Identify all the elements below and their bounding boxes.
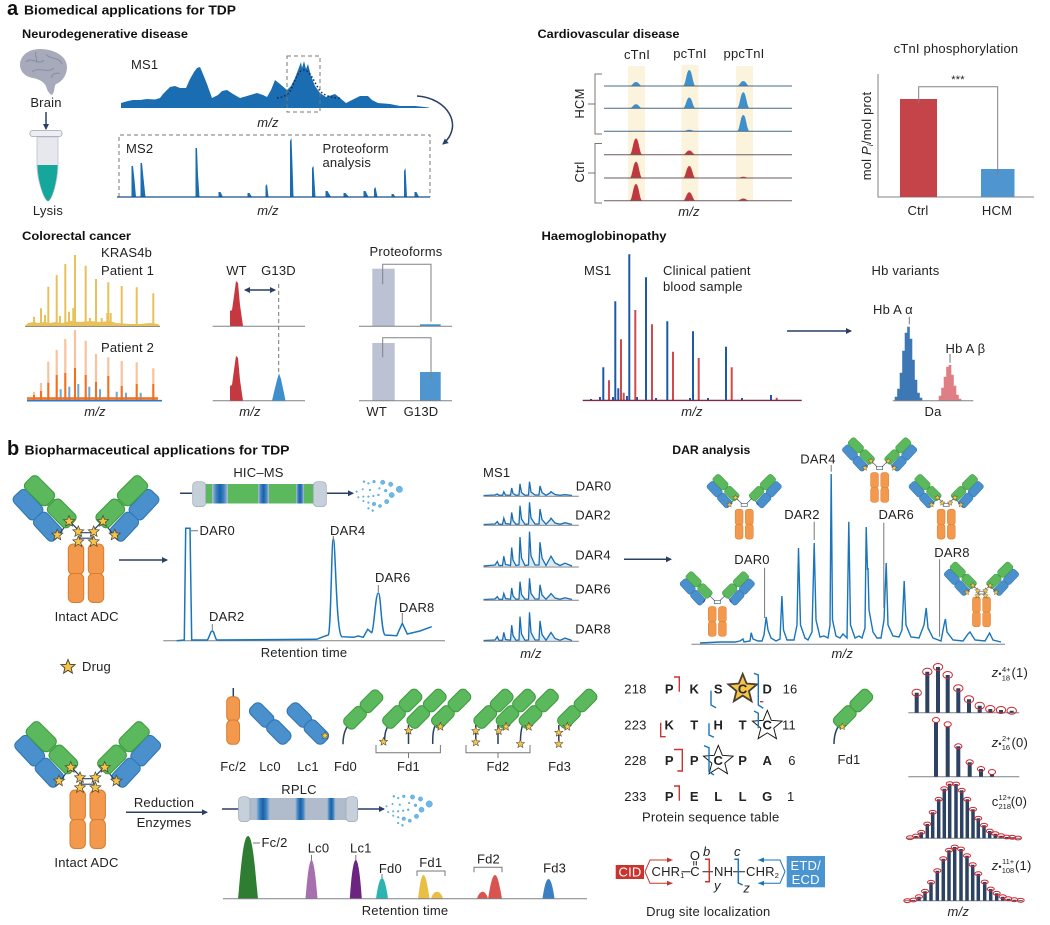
icon: Fd0 [342, 688, 385, 744]
label: Hb A beta: Hb A β [946, 341, 985, 356]
chart: patient 2 spectrum [27, 330, 162, 401]
label: RPLC: RPLC [281, 782, 317, 797]
peak labels: Lc0 [308, 840, 329, 856]
peak labels: DAR2 [209, 609, 244, 624]
sequence residues [624, 682, 797, 804]
row labels [575, 478, 611, 636]
label: z18: 18 [1002, 674, 1010, 682]
heading: neurodegenerative disease: Neurodegenerative disease [22, 27, 188, 41]
label: Intact ADC: Intact ADC [55, 609, 119, 624]
panel: haemoglobinopathy [542, 229, 985, 419]
label: Hb A alpha: Hb A α [873, 302, 913, 317]
labels: WT and G13D: WT [226, 263, 247, 278]
label: Ctrl: Ctrl [572, 161, 587, 183]
axis label: m/z: m/z [257, 115, 279, 130]
bracket: Fd2 [466, 745, 530, 758]
label: ETD/ECD: ETD/ [790, 858, 821, 873]
isotope markers: z16 [932, 718, 996, 774]
peak labels [262, 835, 566, 876]
label: Proteoforms: Proteoforms [369, 244, 443, 259]
panel: colorectal cancer [22, 229, 452, 419]
arrow [119, 559, 167, 561]
tick [909, 317, 950, 363]
icon: Fd1 [831, 687, 875, 744]
icon: Fd3 [555, 687, 599, 748]
sequence residues: 218 [624, 682, 647, 696]
panel: cTnI phosphorylation bar chart [859, 41, 1034, 218]
chart: deconvoluted spectrum [700, 474, 1001, 643]
icon: electrospray [356, 480, 403, 512]
peak labels: DAR8 [399, 600, 434, 615]
blue chevron arrows [758, 860, 785, 883]
sequence residues: 228 [624, 753, 647, 768]
axes [878, 74, 1034, 197]
panel: DAR analysis [672, 437, 1020, 661]
labels: WT and G13D [226, 263, 296, 278]
chemical structure: z [742, 880, 750, 896]
axis label: Da: Da [924, 404, 942, 419]
peak labels: DAR6 [878, 507, 914, 522]
sequence residues: 16 [783, 682, 797, 696]
fragment labels: Fd2 [486, 759, 510, 774]
axis label: m/z: m/z [84, 404, 106, 419]
axis label: m/z: m/z [257, 203, 279, 218]
sequence residues: 233 [624, 789, 647, 804]
icon: Lc0 [247, 701, 293, 746]
arrow heads [758, 858, 764, 886]
label: Drug: Drug [82, 659, 111, 674]
label: MS1: MS1 [584, 263, 611, 278]
peak labels [200, 523, 434, 624]
label: z16: 2+ [1002, 734, 1011, 743]
chart: z108 isotopic bars [907, 847, 1021, 901]
section a heading: Biomedical applications for TDP [24, 2, 236, 18]
star: outline row 2 [752, 710, 782, 739]
sequence residues: E [690, 789, 699, 804]
label: Intact ADC: Intact ADC [54, 855, 119, 870]
chart: chromatogram [177, 528, 432, 641]
peak: G13D patient 2 [272, 373, 286, 401]
sequence residues: 223 [624, 718, 647, 732]
label: Lysis: Lysis [33, 203, 63, 218]
label: z16: (0) [1012, 735, 1028, 750]
icon: Fc/2 [227, 688, 240, 744]
leader lines [765, 465, 940, 637]
chart: Hb A alpha envelope [896, 327, 921, 401]
label: Brain: Brain [30, 95, 62, 110]
baseline [692, 643, 1005, 645]
sequence residues: P [690, 753, 699, 768]
label: CID: CID [618, 864, 642, 880]
arrow [126, 811, 207, 813]
peak ticks and brackets [253, 843, 502, 878]
icon: lysis tube [30, 130, 62, 201]
sequence residues: 11 [782, 718, 796, 732]
label: Hb variants: Hb variants [872, 263, 940, 278]
blue bracket [734, 859, 743, 885]
heading: DAR analysis [672, 443, 751, 457]
sequence residues: P [665, 753, 674, 768]
baseline [583, 399, 802, 401]
peak labels: DAR2 [784, 507, 820, 522]
icon: DAR8 antibody [943, 561, 1020, 627]
dashed selection box [287, 56, 320, 112]
chart: MS1 blue series [591, 254, 771, 401]
sequence residues: L [739, 789, 747, 804]
fragment labels: Fd0 [334, 759, 357, 774]
bracket: Fd1 [376, 745, 440, 758]
labels: proteoform columns: ppcTnI [724, 46, 764, 61]
fragment labels: Lc1 [297, 759, 319, 774]
row labels: DAR4 [575, 548, 611, 562]
label: HCM: HCM [982, 203, 1012, 218]
bar: HCM [981, 169, 1014, 197]
arrow heads [667, 858, 673, 886]
chemical structure: O [690, 848, 700, 863]
arrow [787, 330, 851, 332]
panel: Fd1 fragment spectra [831, 664, 1032, 919]
baselines [213, 326, 305, 401]
chart: stacked MS1 spectra [484, 482, 572, 640]
label: Enzymes: Enzymes [137, 815, 192, 830]
chemical structure: 2 [775, 871, 779, 880]
icon: Fd1 variants [379, 687, 473, 745]
peak labels: Fc/2 [262, 835, 288, 850]
icon: drug star [61, 659, 75, 673]
sequence residues: T [739, 718, 747, 732]
baseline [893, 400, 973, 402]
peak: WT patient 1 [230, 281, 243, 326]
baselines [904, 713, 1023, 901]
row labels: DAR2 [575, 508, 611, 522]
label: ETD/ECD: ECD [792, 872, 820, 887]
sequence residues: C [714, 753, 724, 768]
curved arrow: MS1 to MS2 [417, 96, 453, 144]
label: HCM: HCM [572, 88, 587, 119]
chemical structure: C [690, 864, 700, 879]
dashed box: MS2 [119, 135, 430, 197]
label: Patient 1: Patient 1 [101, 263, 154, 278]
labels: WT and G13D: WT [366, 404, 387, 419]
peak labels: Fd0 [379, 861, 402, 876]
icon: Lc1 [285, 701, 331, 746]
chemical structure: CHR [652, 864, 680, 879]
label: c218: 218 [998, 802, 1011, 811]
icon: Fd2 variants [472, 687, 560, 748]
label: z108: (1) [1015, 858, 1032, 873]
chart: MS2 spectrum [117, 138, 430, 197]
sequence residues: A [763, 753, 773, 768]
significance stars: *** [951, 74, 965, 86]
panel: protein sequence table [624, 673, 797, 824]
label: z18: 4+ [1002, 665, 1011, 674]
sequence residues: P [665, 682, 674, 696]
chromatogram baseline [163, 640, 445, 642]
chart: Hb A beta envelope [940, 365, 960, 401]
chart: z16 isotopic bars [936, 720, 992, 777]
labels: WT and G13D [366, 404, 438, 419]
heading: cardiovascular disease: Cardiovascular disease [538, 27, 680, 41]
heading: Colorectal cancer [22, 229, 131, 243]
fragment labels [220, 759, 571, 774]
chemical structure: 1 [680, 871, 685, 880]
chemical structure: CHR [746, 864, 775, 879]
sequence residues: D [763, 682, 772, 696]
peak labels: Fd2 [477, 852, 500, 866]
icon: DAR2 antibody [706, 473, 782, 539]
label: z108: 108 [1002, 866, 1014, 875]
label: KRAS4b: KRAS4b [101, 245, 152, 260]
axis label: m/z: m/z [239, 404, 261, 419]
peak labels: Fd3 [543, 860, 566, 876]
fragment labels: Fd3 [548, 759, 571, 774]
sequence residues: 6 [788, 753, 796, 768]
chemical structure: b [703, 844, 710, 859]
label: MS2: MS2 [126, 141, 153, 156]
icon: brain [20, 49, 67, 95]
section b heading [7, 438, 290, 460]
label: Patient 2: Patient 2 [101, 340, 154, 355]
sequence residues: P [738, 753, 747, 768]
sequence residues: L [714, 789, 722, 804]
chart title: cTnI phosphorylation [894, 41, 1018, 56]
label: z18: z• [991, 665, 1002, 680]
row labels: DAR6 [575, 582, 611, 596]
peak labels: DAR8 [934, 545, 970, 560]
panel: reduced ADC subunit analysis [13, 687, 599, 918]
peak labels: DAR0 [200, 523, 235, 538]
chart: HCM spectra [604, 70, 792, 131]
label: Fd1: Fd1 [837, 752, 861, 767]
peak labels: DAR4 [330, 523, 365, 538]
peak labels [734, 452, 970, 567]
label: z108 [991, 857, 1032, 875]
peak labels: DAR0 [734, 552, 770, 567]
peak labels: DAR4 [800, 452, 836, 466]
double arrow [245, 289, 275, 291]
peak labels: Lc1 [350, 840, 372, 856]
label: z18 [991, 665, 1028, 682]
labels: proteoform columns: cTnI [624, 47, 650, 62]
peak labels: DAR6 [375, 570, 410, 585]
labels: proteoform columns: pcTnI [673, 46, 707, 61]
label: Proteoform analysis: Proteoform [322, 141, 389, 156]
peak tick marks [191, 531, 402, 630]
label: c218: (0) [1011, 794, 1027, 809]
label: clinical patient blood sample: blood sample [663, 279, 743, 294]
axis label: m/z: m/z [678, 204, 700, 219]
sequence residues: K [690, 682, 700, 696]
labels: WT and G13D: G13D [404, 404, 438, 419]
panel: drug site localization [616, 844, 825, 919]
label: MS1: MS1 [131, 57, 158, 72]
icon: electrospray [386, 795, 432, 826]
sequence residues: 1 [787, 789, 794, 804]
chemical structure: c [734, 844, 741, 859]
chart: patient 1 spectrum [25, 255, 160, 326]
label: z18: (1) [1012, 665, 1028, 680]
icon: RPLC column [222, 797, 384, 822]
sequence residues: C [738, 682, 748, 696]
fragment labels: Fc/2 [220, 759, 246, 774]
chemical structure: NH [714, 864, 733, 879]
icon: intact ADC with drugs [11, 474, 161, 602]
panel: MS1 stack [483, 465, 671, 661]
sequence residues: T [690, 718, 698, 732]
dashed line [278, 284, 280, 373]
chart: c218 isotopic bars [910, 784, 1018, 838]
bar chart: proteoforms [359, 264, 452, 401]
y axis label: /mol prot [859, 92, 874, 144]
sequence residues: P [665, 789, 674, 804]
section b heading: Biopharmaceutical applications for TDP [24, 442, 290, 458]
heading: Haemoglobinopathy [542, 229, 667, 243]
sequence residues: C [763, 718, 773, 732]
y axis label: mol P [859, 146, 874, 180]
peak: WT patient 2 [230, 356, 243, 401]
fragment labels: Fd1 [397, 759, 420, 774]
row labels: DAR0 [576, 478, 611, 494]
sequence residues: S [714, 682, 723, 696]
axis label: m/z: m/z [832, 646, 853, 661]
fragment labels: Lc0 [259, 759, 281, 774]
y axis label: i [866, 144, 875, 146]
axis label: m/z: m/z [520, 646, 542, 661]
baseline [223, 898, 587, 900]
labels: proteoform columns [624, 46, 764, 62]
axis label: retention time: Retention time [362, 903, 448, 918]
label: z108: 11+ [1002, 857, 1015, 866]
arrow [624, 558, 671, 560]
label: z16: 16 [1002, 743, 1010, 752]
chemical structure [652, 844, 779, 896]
chart: RPLC chromatogram peaks [238, 836, 554, 899]
sequence residues: H [714, 718, 723, 732]
axis label: m/z: m/z [948, 904, 969, 919]
label: c218: c [992, 794, 999, 809]
caption: Drug site localization [646, 904, 770, 919]
bracket: HCM [588, 74, 602, 203]
isotope markers: c218 [906, 782, 1022, 840]
red fragment brackets [661, 677, 763, 801]
chart: MS1 red series [609, 310, 777, 401]
blue fragment brackets [704, 673, 763, 775]
label: ETD/ECD [787, 856, 825, 887]
label: MS1: MS1 [483, 465, 510, 480]
panel: neurodegenerative disease [20, 27, 453, 218]
baselines [484, 496, 579, 641]
panel: intact ADC HIC-MS [11, 465, 445, 674]
chemical structure: y [713, 878, 722, 893]
label: Reduction: Reduction [134, 795, 194, 810]
sequence residues: K [665, 718, 675, 732]
label: c218: 12+ [998, 793, 1012, 802]
icon: HIC column [180, 482, 353, 507]
icon: intact ADC with drugs [13, 720, 163, 848]
section b heading: b [7, 438, 19, 460]
label: z108: z• [991, 858, 1002, 873]
star: drug site row 1 [728, 674, 757, 701]
label: c218 [992, 793, 1027, 811]
axis label: retention time: Retention time [261, 645, 347, 660]
labels: WT and G13D: G13D [261, 263, 296, 278]
isotope markers: z108 [904, 845, 1024, 903]
icon: DAR0 antibody [679, 571, 756, 636]
label: z16: z• [991, 735, 1002, 750]
dotted overlay: isolated precursor envelope [277, 70, 340, 98]
label: Proteoform analysis: analysis [322, 155, 371, 170]
sequence residues: G [762, 789, 772, 804]
row labels: DAR8 [575, 622, 611, 636]
peak labels: Fd1 [419, 855, 442, 870]
label: Ctrl: Ctrl [907, 203, 929, 218]
isotope markers: z18 [912, 664, 1016, 714]
star: outline row 3 [703, 745, 733, 774]
significance bracket [919, 87, 998, 175]
red bracket [705, 859, 709, 882]
caption: protein sequence table: Protein sequence table [642, 810, 779, 824]
chart: MS1 spectrum [121, 61, 429, 108]
label: HIC-MS: HIC–MS [233, 465, 284, 480]
axis label: m/z: m/z [681, 404, 703, 419]
chart: control spectra [604, 138, 792, 201]
panel: cardiovascular disease [538, 27, 792, 219]
highlight bands [628, 65, 753, 200]
icon: DAR6 antibody [908, 473, 984, 539]
red chevron arrows [645, 860, 672, 883]
bar: Ctrl [900, 99, 937, 197]
label: z16 [991, 734, 1028, 752]
arrow: brain to lysis [45, 112, 47, 129]
section a heading [7, 0, 236, 20]
chart: z18 isotopic bars [917, 667, 1012, 713]
icon: DAR4 antibody [841, 437, 918, 502]
label: clinical patient blood sample: Clinical patient [663, 263, 751, 278]
